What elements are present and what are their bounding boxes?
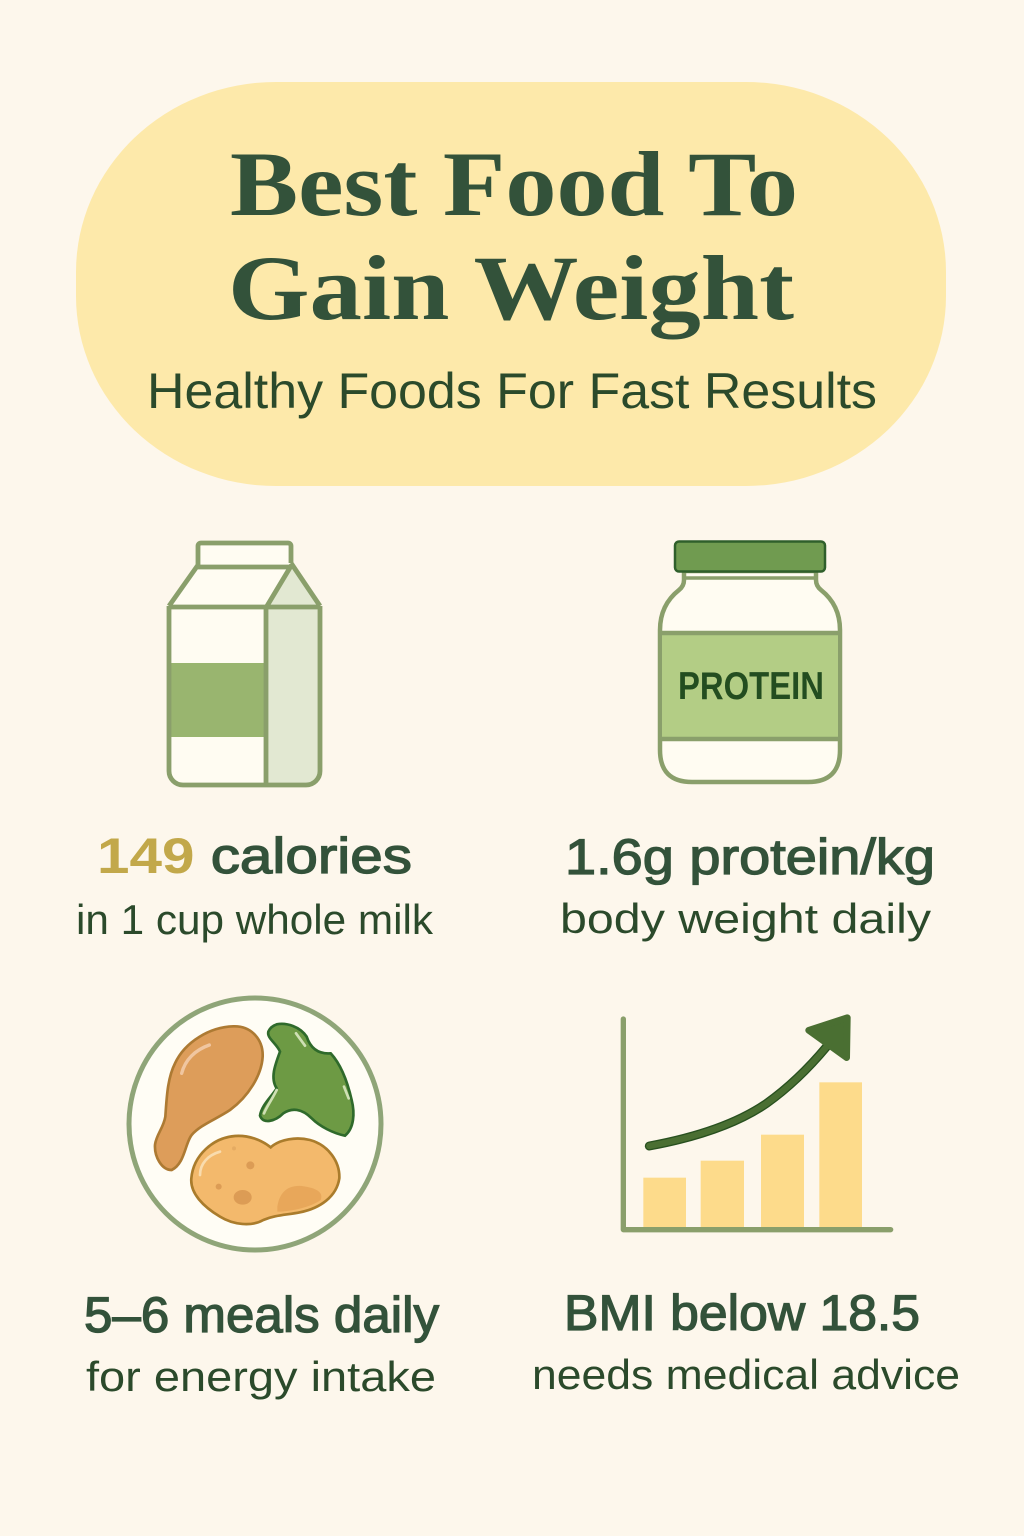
panel: protein [560,542,935,942]
stat: meals: 5–6 meals daily [84,1287,439,1343]
icon: plate of food [129,998,381,1250]
caption: milk: in 1 cup whole milk [76,896,434,943]
potato [191,1136,339,1224]
caption: protein: body weight daily [560,895,931,942]
chart: rising bars with arrow [623,1018,891,1230]
title [228,133,798,339]
bars [643,1082,862,1228]
broccoli [260,1024,353,1136]
stat: 149 calories: 149 calories [97,828,412,884]
banner pill [76,82,946,486]
stat: protein per kg: 1.6g protein/kg [565,829,935,885]
axes [623,1019,891,1230]
title: Gain Weight [228,237,794,339]
title banner [76,82,946,486]
arrow [649,1018,847,1146]
stat: BMI: BMI below 18.5 [564,1285,920,1341]
panel: meals [84,998,439,1400]
panel: whole milk [76,543,434,943]
panel: BMI [532,1018,960,1398]
icon: protein jar: PROTEIN [678,665,824,708]
caption: meals: for energy intake [86,1353,436,1400]
caption: BMI: needs medical advice [532,1351,960,1398]
chicken drumstick [155,1026,263,1170]
icon: milk carton [169,543,320,785]
icon: protein jar [660,542,840,782]
subtitle: Healthy Foods For Fast Results [147,363,877,419]
title: Best Food To [230,133,798,235]
